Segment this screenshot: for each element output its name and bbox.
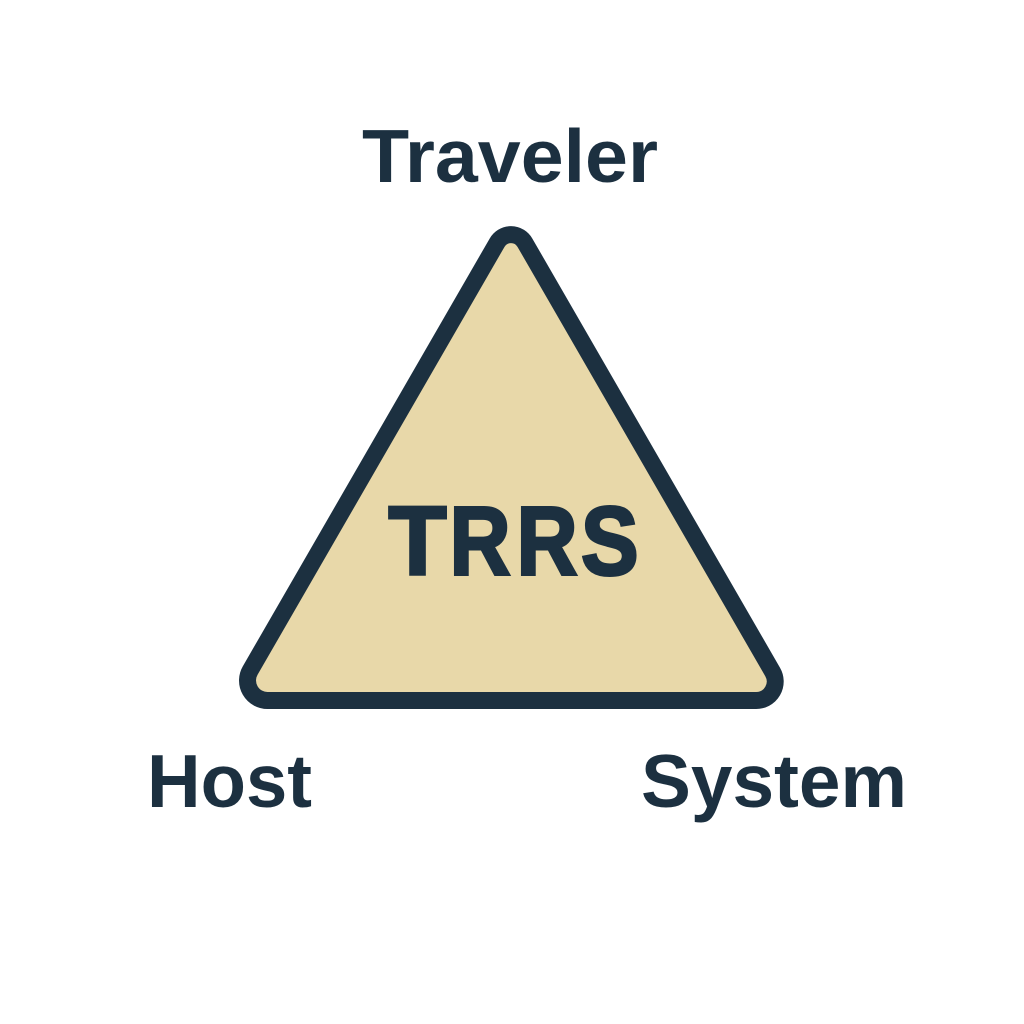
center label: [388, 488, 639, 596]
triangle: [248, 235, 775, 700]
label: System: System: [641, 739, 907, 823]
center label: T: [388, 488, 447, 596]
label: Traveler: Traveler: [362, 114, 658, 198]
label: Host: Host: [147, 739, 312, 823]
center label: R: [450, 488, 511, 596]
center label: R: [517, 488, 578, 596]
center label: S: [581, 488, 639, 596]
